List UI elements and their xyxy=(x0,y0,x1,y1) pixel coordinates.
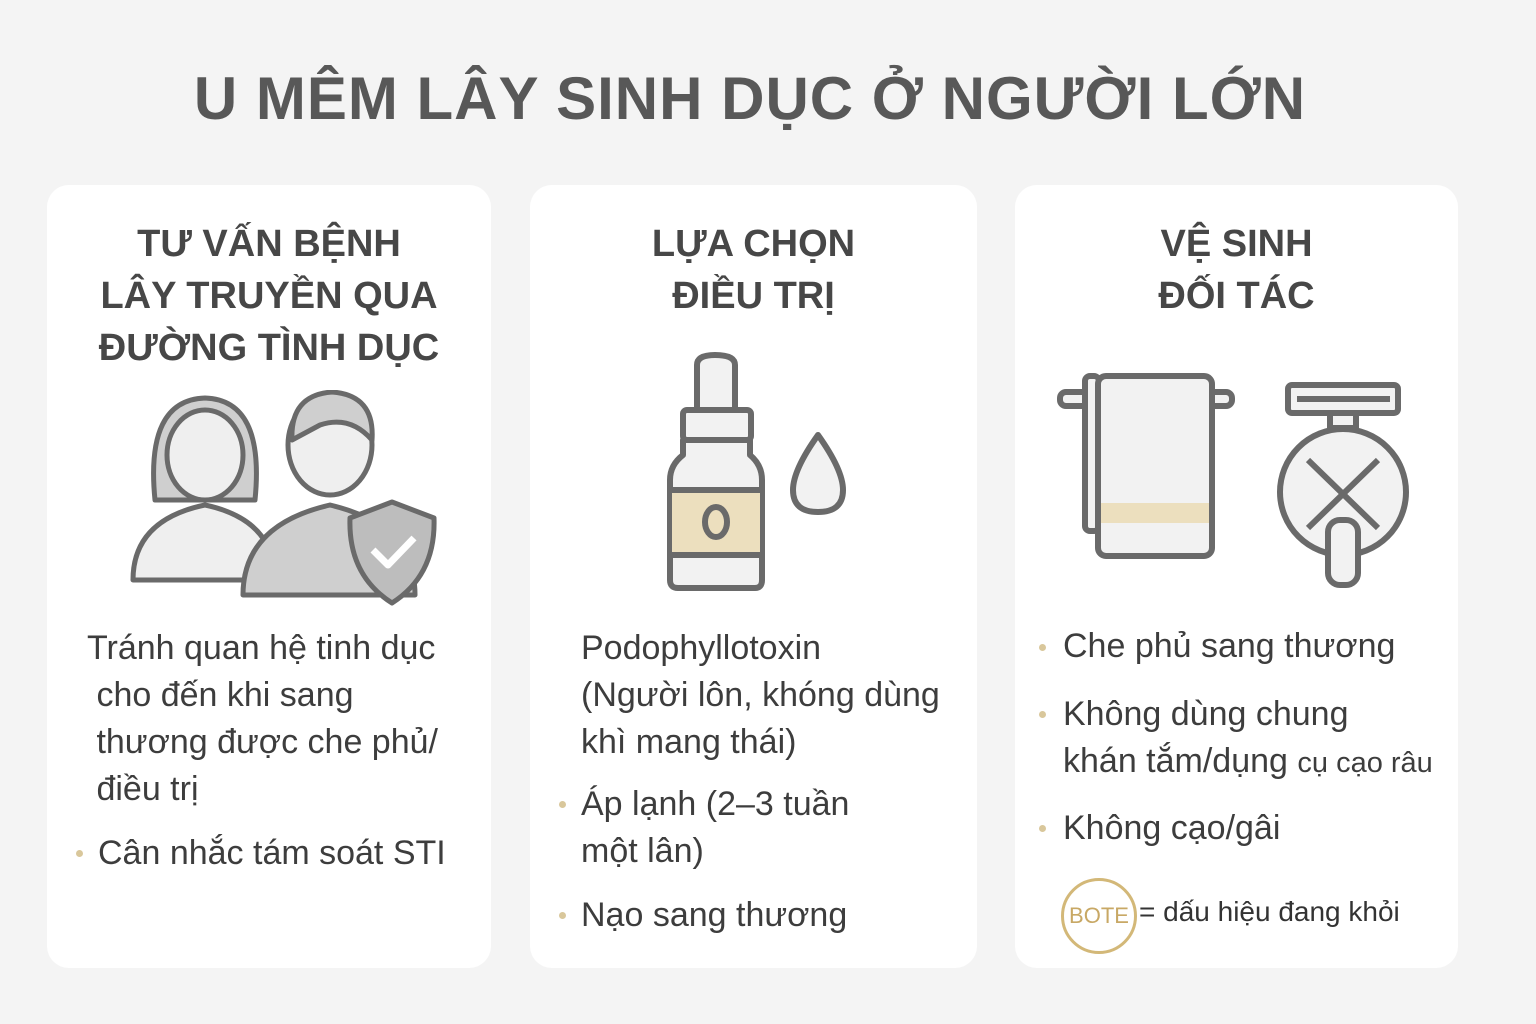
text: treatment: (Người lôn, khóng dùng xyxy=(581,676,940,714)
heading: counseling: TƯ VẤN BỆNH xyxy=(137,223,401,265)
heading: counseling: ĐƯỜNG TÌNH DỤC xyxy=(99,327,439,369)
note: badge legend xyxy=(1061,878,1400,954)
note: badge legend: BOTE xyxy=(1069,903,1129,928)
heading: hygiene: VỆ SINH xyxy=(1160,223,1313,265)
heading: treatment: ĐIỀU TRỊ xyxy=(672,275,835,317)
panel: treatment: Áp lạnh (2–3 tuần xyxy=(581,785,849,823)
text: treatment xyxy=(581,629,940,761)
icon: towel and razor xyxy=(1057,373,1409,588)
heading: counseling xyxy=(98,222,439,369)
heading: treatment xyxy=(652,223,855,317)
text: counseling xyxy=(87,629,438,808)
panel: counseling xyxy=(47,185,491,968)
heading: treatment: LỰA CHỌN xyxy=(652,223,855,265)
text: counseling: điều trị xyxy=(96,770,198,808)
title: U MÊM LÂY SINH DỤC Ở NGƯỜI LỚN xyxy=(194,65,1306,132)
panel: treatment: Nạo sang thương xyxy=(581,896,847,934)
note: badge legend: = dấu hiệu đang khỏi xyxy=(1139,896,1400,927)
panel: hygiene xyxy=(1015,185,1458,968)
panel: hygiene: Không dùng chung xyxy=(1063,695,1348,733)
text: treatment: Podophyllotoxin xyxy=(581,629,821,667)
icon: couple with shield xyxy=(130,390,437,606)
text: treatment: khì mang thái) xyxy=(581,723,796,761)
panel: counseling: Cân nhắc tám soát STI xyxy=(98,834,446,872)
panel: treatment: một lân) xyxy=(581,832,704,870)
heading: hygiene xyxy=(1158,222,1315,317)
panel: hygiene: Không cạo/gâi xyxy=(1063,809,1280,847)
text: counseling: Tránh quan hệ tinh dục xyxy=(87,629,435,667)
panel: hygiene: khán tắm/dụng cụ cạo râu xyxy=(1063,742,1433,780)
text: counseling: cho đến khi sang xyxy=(96,676,354,714)
text: counseling: thương được che phủ/ xyxy=(96,723,438,761)
icon: dropper bottle xyxy=(667,352,846,591)
heading: hygiene: ĐỐI TÁC xyxy=(1158,275,1315,317)
panel: treatment xyxy=(530,185,977,968)
heading: counseling: LÂY TRUYỀN QUA xyxy=(100,275,438,317)
panel: hygiene: Che phủ sang thương xyxy=(1063,627,1395,665)
text: hygiene xyxy=(1039,644,1046,651)
